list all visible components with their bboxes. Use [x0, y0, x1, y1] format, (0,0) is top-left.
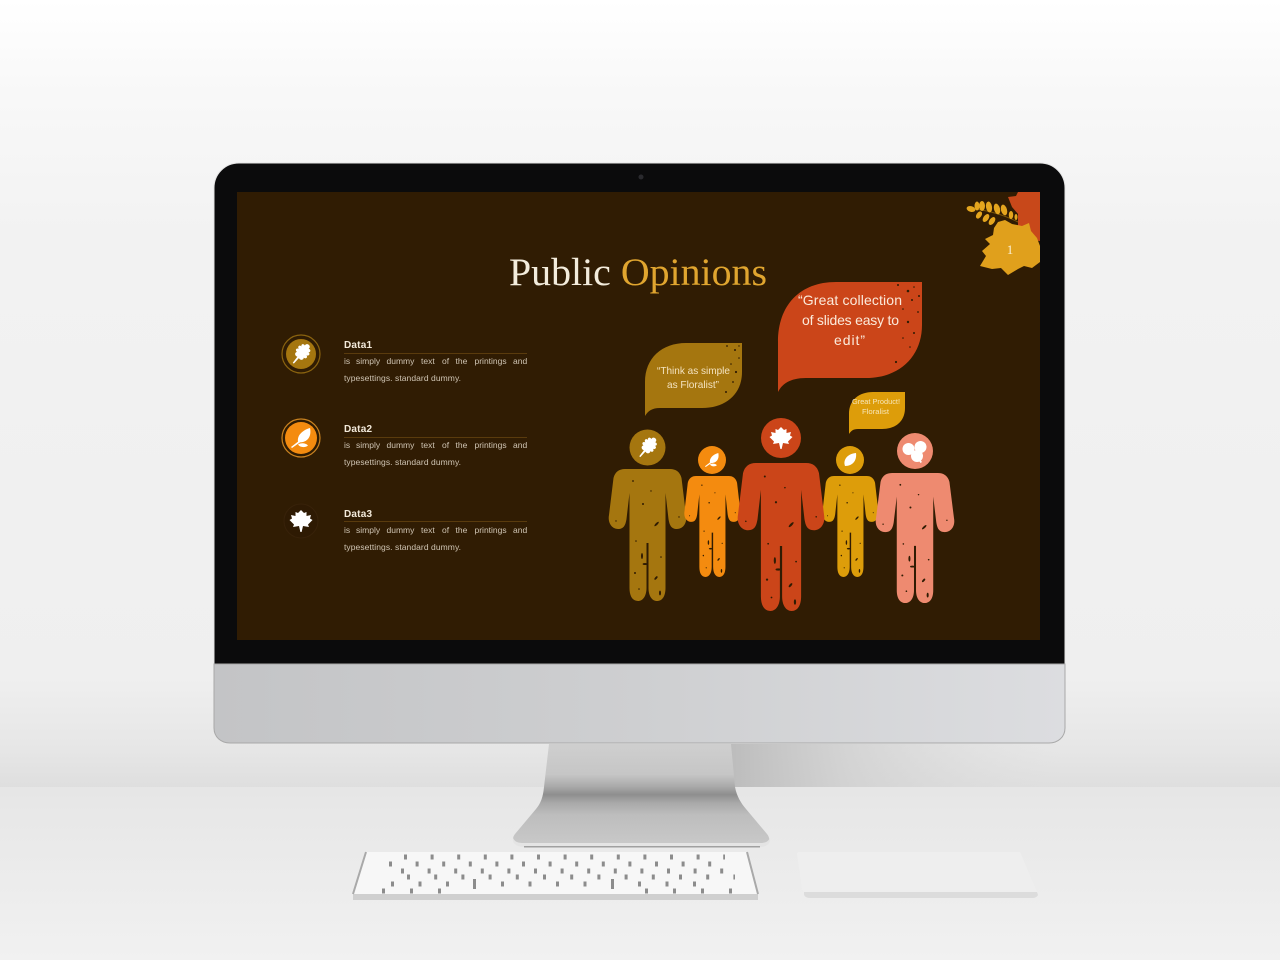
data 2 text: is	[344, 440, 350, 450]
monitor chin	[214, 664, 1065, 743]
data 2 heading: Data2	[344, 424, 372, 435]
leaf sprig	[966, 201, 1018, 226]
data 1 text: simply	[356, 356, 381, 366]
speech bubble: red: of slides easy to	[802, 312, 899, 328]
data 3 text: dummy	[386, 525, 415, 535]
data list	[282, 335, 527, 552]
title: Public Opinions	[509, 251, 767, 294]
data 2 text: simply	[356, 440, 381, 450]
data 3 text: the	[456, 525, 468, 535]
data 2 text: printings	[474, 440, 507, 450]
data 2 text: of	[442, 440, 450, 450]
data 3 text: and	[513, 525, 527, 535]
data 1 text: dummy	[386, 356, 415, 366]
data 3 text: simply	[356, 525, 381, 535]
data item 2	[282, 419, 527, 467]
data 3 rule	[344, 521, 527, 522]
person 4: gold	[822, 446, 879, 577]
keyboard sides	[353, 852, 758, 894]
data 2 rule	[344, 437, 527, 438]
keyboard key gaps	[382, 857, 735, 891]
stand neck and base	[513, 744, 769, 845]
desk surface	[0, 787, 1280, 960]
stand base edge	[513, 838, 770, 847]
data 3 text: of	[442, 525, 450, 535]
speech bubble: brown: as Floralist”	[667, 379, 719, 391]
data item 1	[282, 335, 527, 383]
trackpad top	[797, 852, 1037, 892]
keyboard edges	[353, 894, 758, 900]
data 3 text: is	[344, 525, 350, 535]
wall shadow right of stand	[730, 744, 1060, 788]
slide number: 1	[1007, 242, 1013, 257]
data 1 text: of	[442, 356, 450, 366]
trackpad edge	[804, 892, 1038, 898]
gold leaf	[980, 220, 1040, 275]
data 3 text: printings	[474, 525, 507, 535]
speech bubble: red	[778, 282, 922, 392]
data item 3	[284, 504, 527, 552]
red leaf	[1008, 192, 1040, 241]
webcam	[638, 174, 644, 180]
data 2 text: the	[456, 440, 468, 450]
person 3: red	[738, 418, 824, 611]
data 1 text: printings	[474, 356, 507, 366]
monitor	[214, 163, 1065, 743]
person 5: salmon	[876, 433, 954, 603]
icon: maple leaf badge	[284, 504, 318, 538]
data 2 text: dummy	[386, 440, 415, 450]
data 1 text: the	[456, 356, 468, 366]
slide screen	[237, 192, 1040, 640]
corner leaf decoration	[966, 192, 1040, 275]
data 2 text: and	[513, 440, 527, 450]
speech bubble: red: “Great collection	[798, 292, 902, 308]
monitor stand	[513, 744, 770, 848]
data 1 text: and	[513, 356, 527, 366]
keyboard	[353, 852, 758, 900]
stand base shadow line	[524, 846, 760, 848]
data 3 heading: Data3	[344, 509, 372, 520]
icon: oak leaf badge	[282, 335, 320, 373]
monitor bezel	[214, 163, 1065, 664]
person 2: orange	[684, 446, 741, 577]
data 1 heading: Data1	[344, 340, 372, 351]
speech bubble: gold	[849, 392, 905, 434]
data 3 text: text	[421, 525, 435, 535]
speech bubble: red: edit”	[834, 332, 865, 348]
people chart	[609, 418, 954, 611]
speech bubble: brown	[645, 343, 742, 416]
data 2 text: text	[421, 440, 435, 450]
keyboard body	[353, 852, 758, 900]
data 3 text line 2: typesettings. standard dummy.	[344, 542, 461, 552]
data 1 text: is	[344, 356, 350, 366]
icon: sprig badge	[282, 419, 320, 457]
speech bubble: gold: Great Product!	[852, 397, 900, 406]
speech bubble: brown: “Think as simple	[657, 365, 730, 377]
speech bubble: gold: Floralist	[862, 407, 890, 416]
data 1 rule	[344, 353, 527, 354]
trackpad	[797, 852, 1038, 898]
data 1 text line 2: typesettings. standard dummy.	[344, 373, 461, 383]
person 1: brown	[609, 430, 686, 601]
data 1 text: text	[421, 356, 435, 366]
data 2 text line 2: typesettings. standard dummy.	[344, 457, 461, 467]
